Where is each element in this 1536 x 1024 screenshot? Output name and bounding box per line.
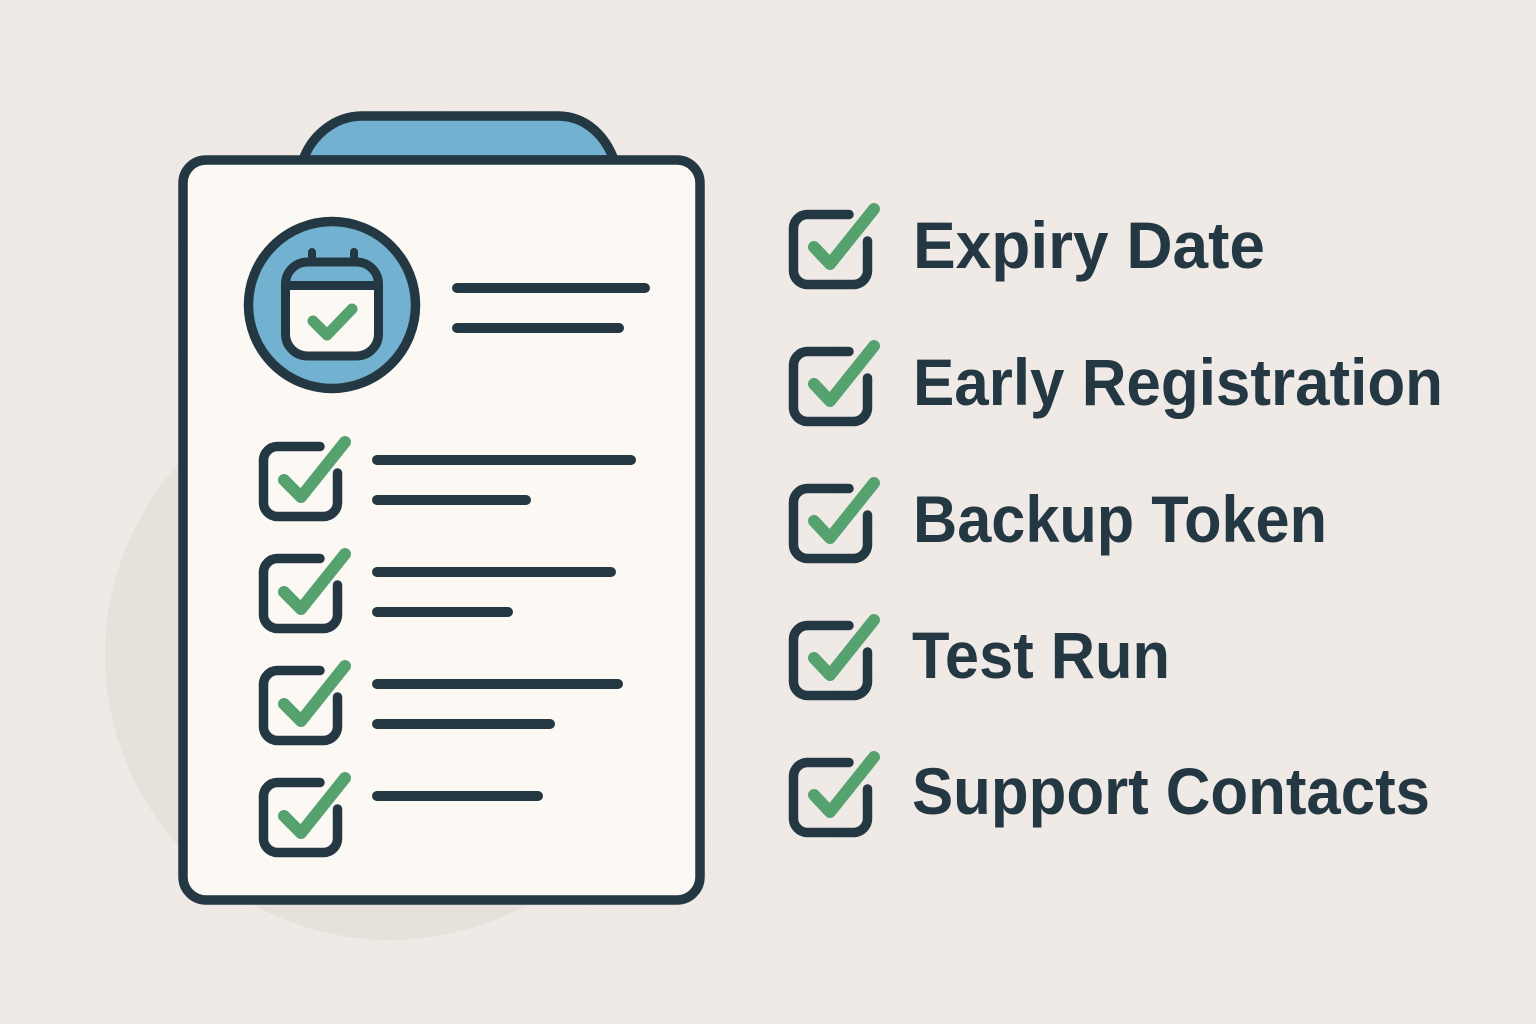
- clipboard row 4: [264, 778, 538, 852]
- checklist item: Test Run: [794, 618, 1170, 696]
- clipboard row 3: [264, 666, 618, 740]
- clipboard row 2: [264, 554, 611, 628]
- checklist item: Support Contacts: Support Contacts: [912, 754, 1430, 828]
- background circle: [105, 370, 675, 940]
- clipboard sheet: [183, 160, 700, 900]
- clipboard row 1: [264, 442, 631, 516]
- clipboard: [183, 116, 700, 900]
- clipboard tab: [303, 116, 614, 160]
- header text lines: [457, 288, 645, 328]
- checklist item: Backup Token: Backup Token: [913, 482, 1327, 556]
- icon: calendar badge: [248, 222, 416, 388]
- checklist item: Test Run: Test Run: [912, 618, 1170, 692]
- checklist item: Expiry Date: Expiry Date: [913, 208, 1265, 282]
- checklist item: Early Registration: Early Registration: [913, 345, 1443, 419]
